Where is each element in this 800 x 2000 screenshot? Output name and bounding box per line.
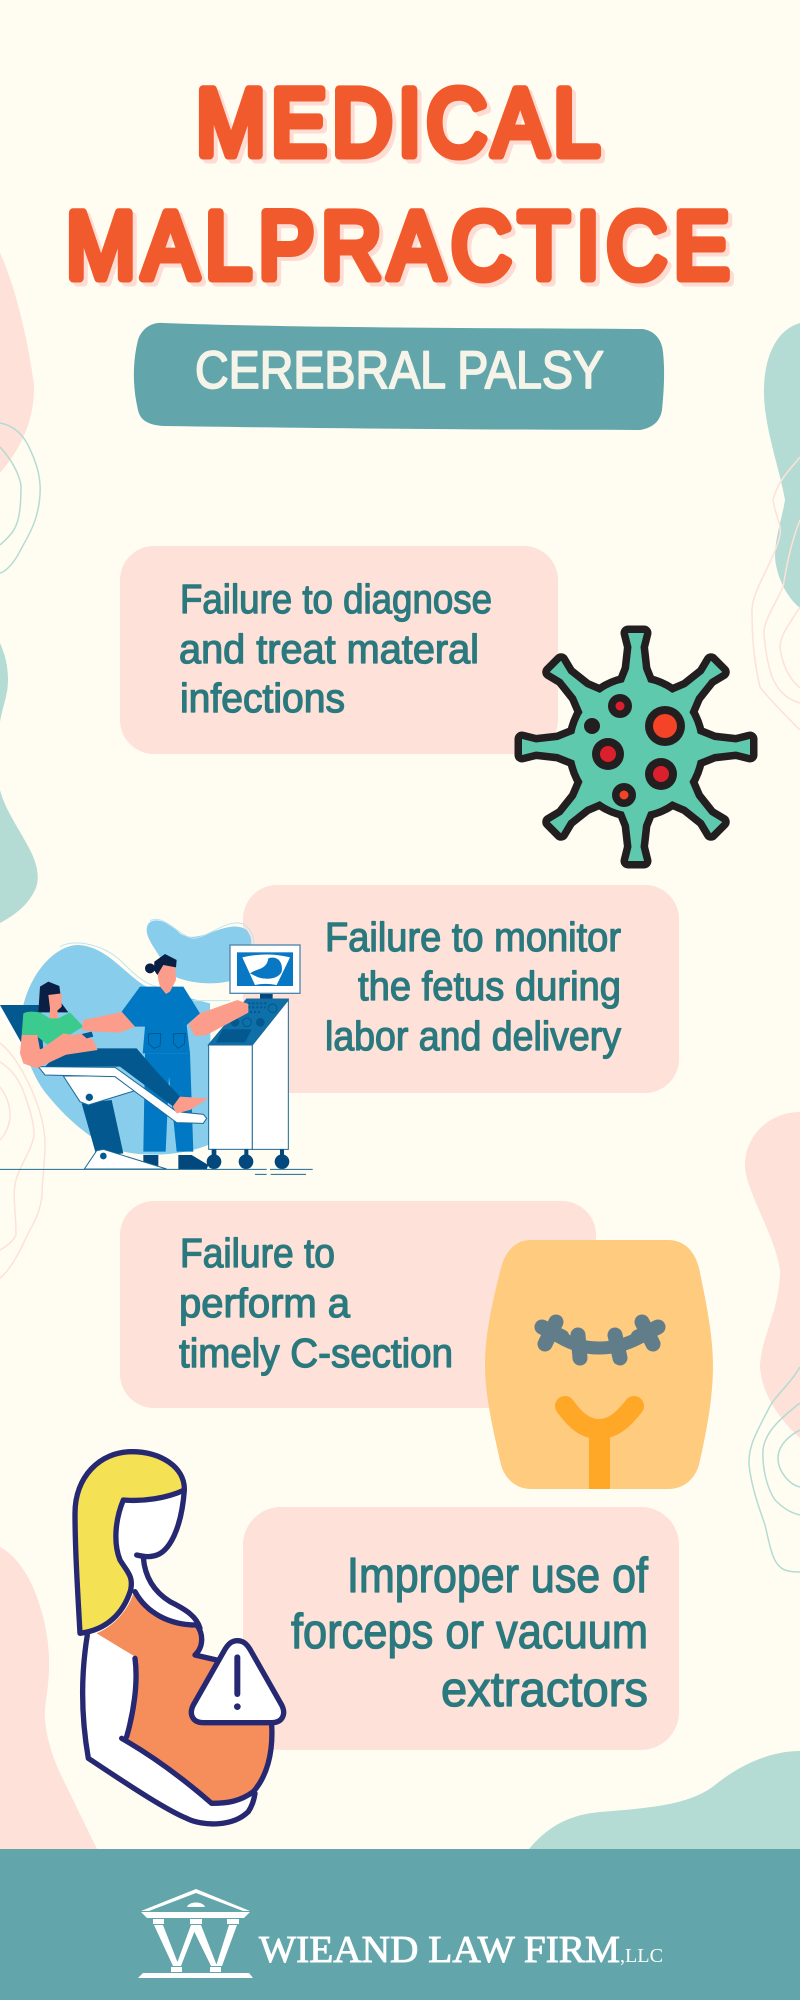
background blobs and contour lines bbox=[0, 253, 800, 1849]
text: c-section bbox=[179, 1230, 453, 1376]
chair bbox=[82, 1100, 123, 1157]
subtitle banner bbox=[134, 323, 664, 430]
icon: c-section scar bbox=[485, 1240, 713, 1489]
text: maternal infections: and treat materal bbox=[179, 626, 479, 672]
title shadow: MALPRACTICE bbox=[70, 196, 733, 302]
patient bbox=[38, 982, 68, 1012]
text: forceps: Improper use of bbox=[347, 1549, 648, 1603]
illustration: ultrasound exam bbox=[0, 919, 313, 1174]
background blobs bbox=[21, 945, 212, 1155]
illustration: pregnant woman with warning bbox=[75, 1452, 284, 1824]
text: firm name: ,LLC bbox=[620, 1945, 663, 1967]
text: forceps: forceps or vacuum bbox=[291, 1605, 648, 1659]
title lettering: MEDICAL bbox=[196, 69, 600, 175]
text: forceps bbox=[291, 1549, 648, 1717]
warning sign bbox=[191, 1641, 284, 1723]
text: maternal infections bbox=[179, 576, 492, 721]
title shadow: MEDICAL bbox=[200, 73, 604, 179]
outlines bbox=[83, 1490, 272, 1824]
text: c-section: perform a bbox=[179, 1280, 350, 1326]
panel: forceps bbox=[243, 1507, 679, 1750]
doctor right arm bbox=[188, 1000, 248, 1036]
title lettering: MALPRACTICE bbox=[66, 192, 730, 298]
text: maternal infections: Failure to diagnose bbox=[180, 576, 492, 622]
doctor upper body bbox=[82, 1012, 135, 1033]
title bbox=[66, 69, 733, 302]
text: fetal monitoring: labor and delivery bbox=[325, 1013, 621, 1059]
subtitle text: CEREBRAL PALSY bbox=[195, 341, 604, 400]
text: firm name: WIEAND LAW FIRM bbox=[259, 1929, 620, 1971]
text: fetal monitoring bbox=[325, 914, 621, 1059]
icon: virus bbox=[522, 633, 750, 861]
title lettering bbox=[66, 69, 730, 298]
dress bbox=[97, 1593, 272, 1803]
text: c-section: Failure to bbox=[180, 1230, 335, 1276]
arm bbox=[83, 1633, 253, 1824]
face and neck bbox=[116, 1490, 202, 1637]
text: fetal monitoring: Failure to monitor bbox=[325, 914, 621, 960]
panel: c-section bbox=[120, 1201, 596, 1408]
panel: fetal monitoring bbox=[243, 885, 679, 1093]
footer bbox=[0, 1849, 800, 2000]
ground line bbox=[0, 1169, 313, 1174]
doctor legs bbox=[143, 1155, 208, 1169]
text: c-section: timely C-section bbox=[179, 1330, 453, 1376]
hair bbox=[75, 1452, 184, 1633]
title shadow bbox=[70, 73, 733, 302]
ultrasound machine bbox=[260, 993, 273, 1000]
text: forceps: extractors bbox=[441, 1663, 648, 1717]
text: maternal infections: infections bbox=[180, 675, 345, 721]
text: fetal monitoring: the fetus during bbox=[358, 963, 621, 1009]
panel: maternal infections bbox=[120, 546, 558, 754]
icon: law firm logo bbox=[138, 1889, 253, 1978]
